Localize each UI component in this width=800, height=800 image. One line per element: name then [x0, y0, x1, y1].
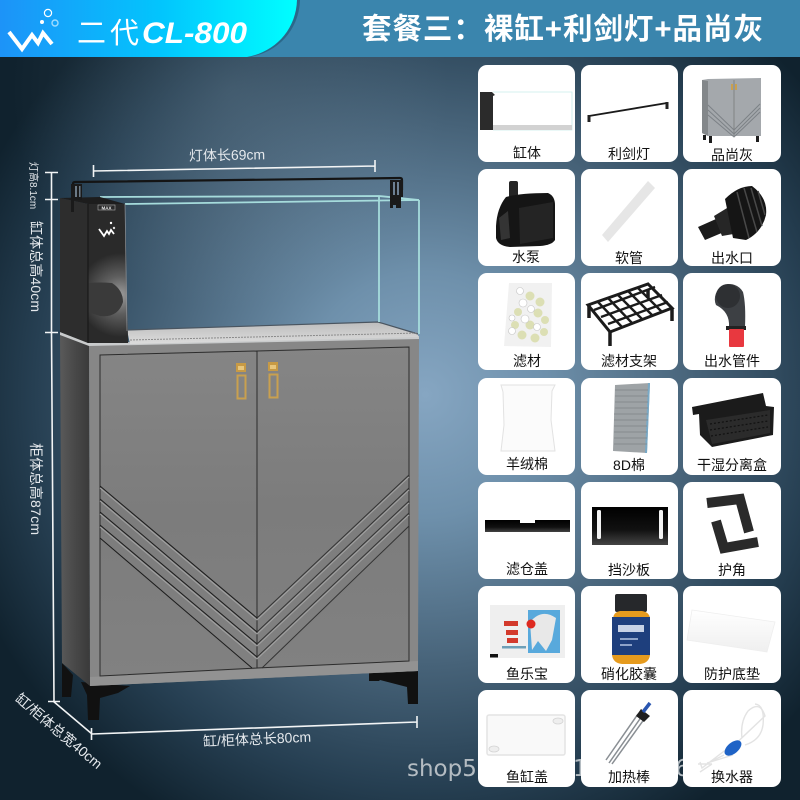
card: pump: 水泵: [512, 249, 540, 265]
MAX badge: [98, 205, 115, 210]
substrate floor: [127, 322, 418, 344]
door handles: [236, 362, 278, 398]
card: sand baffle: [581, 482, 678, 579]
card: nitrifying capsules: 硝化胶囊: [601, 666, 657, 682]
card: tank lid: 鱼缸盖: [506, 769, 548, 785]
filter column: [60, 197, 128, 343]
card: outlet pipe: [683, 273, 781, 370]
card: protective pad: [683, 586, 781, 683]
card: dry-wet separator box: [683, 378, 781, 475]
card: dry-wet separator box: 干湿分离盒: [697, 457, 767, 473]
card: 8D cotton: 8D棉: [613, 457, 645, 473]
card: cabinet grey: 品尚灰: [711, 147, 753, 163]
card: light: 利剑灯: [608, 146, 650, 162]
dimension: heights: [27, 162, 60, 702]
header band: [0, 0, 800, 57]
label: tank height: 缸体总高40cm: [28, 221, 44, 312]
card: hose: 软管: [615, 250, 643, 266]
card: light: [581, 65, 678, 162]
dimension: total length: [92, 716, 417, 749]
card: fish powder: 鱼乐宝: [506, 666, 548, 682]
cabinet legs: [62, 663, 418, 720]
cabinet: [60, 332, 419, 720]
left door: [100, 351, 257, 676]
label: light height: 灯高8.1cm: [27, 162, 40, 209]
card: sand baffle: 挡沙板: [608, 562, 650, 578]
card: hose: [581, 169, 678, 266]
label: cabinet height: 柜体总高87cm: [28, 443, 44, 535]
aquarium: [60, 178, 419, 344]
dimension: total width: 缸/柜体总宽40cm: [12, 690, 106, 772]
cabinet side panel: [60, 332, 90, 686]
card: tank: [478, 65, 575, 162]
card: heater rod: 加热棒: [608, 769, 650, 785]
card: tank: 缸体: [513, 145, 541, 161]
package title: 套餐三：裸缸+利剑灯+品尚灰: [362, 13, 763, 46]
brand logo: [9, 9, 58, 49]
card: filter compartment lid: 滤仓盖: [506, 561, 548, 577]
card: water outlet: 出水口: [711, 250, 753, 266]
product name: 二代: [77, 10, 139, 52]
watermark: 1: [573, 756, 588, 782]
watermark: 6: [675, 756, 690, 782]
card: pump: [478, 169, 575, 266]
dimension: total length: 缸/柜体总长80cm: [203, 729, 311, 749]
dimension: light length: 灯体长69cm: [189, 146, 265, 164]
light bar: [71, 178, 403, 212]
card: fish powder: [478, 586, 575, 683]
card: wool cotton: 羊绒棉: [506, 456, 548, 472]
card: heater rod: [581, 690, 678, 787]
glass tank outline: [100, 196, 419, 334]
card: corner protector: [683, 482, 781, 579]
card: nitrifying capsules: [581, 586, 678, 683]
card: filter rack: [581, 273, 678, 370]
card: water changer: 换水器: [711, 769, 753, 785]
card: 8D cotton: [581, 378, 678, 475]
card: corner protector: 护角: [718, 562, 746, 578]
card: tank lid: [478, 690, 575, 787]
header logo tab: [0, 0, 300, 57]
card: cabinet grey: [683, 65, 781, 163]
cabinet front frame: [89, 336, 419, 686]
right door: [257, 347, 409, 668]
card: filter compartment lid: [478, 482, 575, 579]
column logo: [99, 222, 115, 236]
card: wool cotton: [478, 378, 575, 475]
dimension: light length: [93, 146, 375, 177]
product name: CL-800: [142, 17, 247, 50]
card: outlet pipe: 出水管件: [704, 353, 760, 369]
card: water changer: [683, 690, 781, 787]
card: filter media: 滤材: [513, 353, 541, 369]
watermark: shop5: [407, 756, 477, 782]
card: protective pad: 防护底垫: [704, 666, 760, 682]
watermark: [407, 756, 690, 782]
card: filter media: [478, 273, 575, 370]
card: water outlet: [683, 169, 781, 266]
product name: [77, 10, 247, 52]
card: filter rack: 滤材支架: [601, 353, 657, 369]
chevron grooves: [100, 475, 409, 668]
MAX badge: MAX: [102, 206, 112, 210]
